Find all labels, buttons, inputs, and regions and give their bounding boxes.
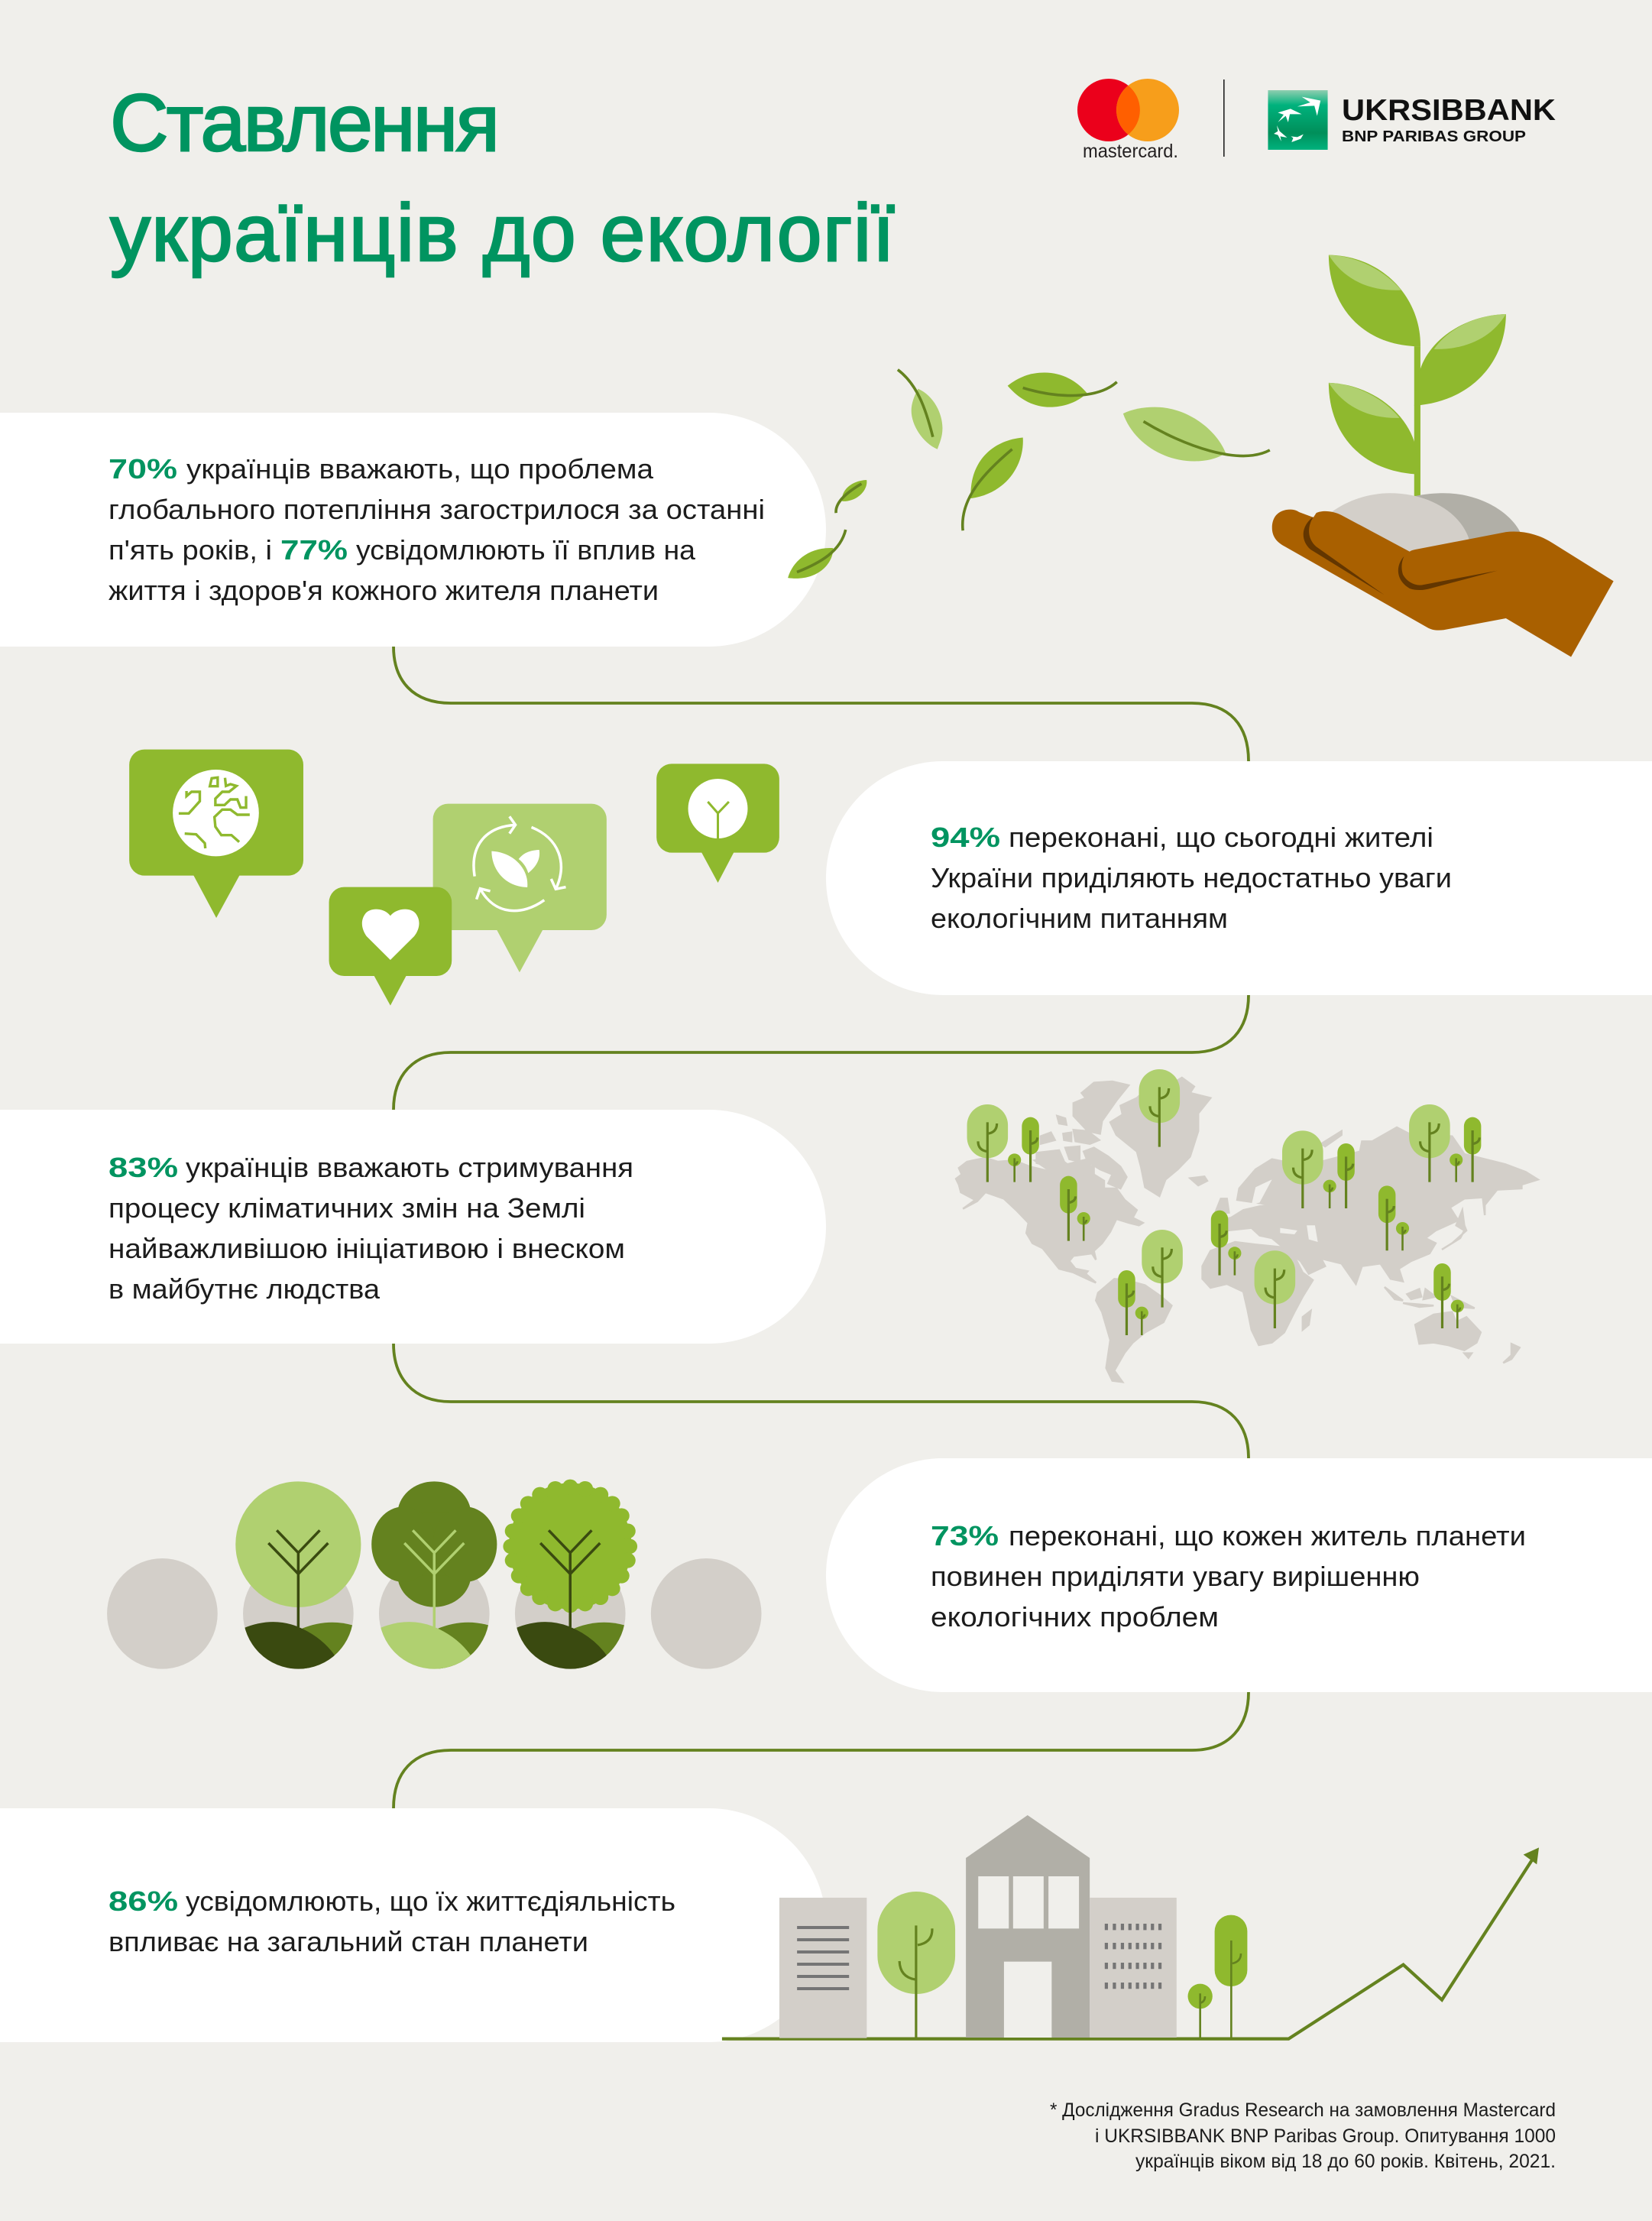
small tree (1188, 1984, 1213, 2038)
falling leaves (788, 370, 1270, 579)
bubble: globe (129, 750, 303, 918)
title (110, 78, 895, 278)
bubble: heart (329, 887, 452, 1006)
grey circle left (107, 1558, 218, 1669)
grey circle right (651, 1558, 761, 1669)
logo: mastercard: mastercard. (1083, 141, 1178, 162)
panel: 73% (826, 1458, 1652, 1692)
bubble: recycling leaves (433, 804, 607, 972)
statement text 70% and 77%: українців вважають, що проблема (186, 453, 654, 485)
statement text 73%: повинен приділяти увагу вирішенню (931, 1561, 1420, 1592)
speech bubbles illustration (129, 750, 779, 1006)
statement text 70% and 77% (109, 453, 765, 606)
ground line and rising arrow (722, 1847, 1539, 2039)
statement text 94%: екологічним питанням (931, 903, 1228, 934)
map trees (967, 1069, 1481, 1335)
tree: round light (235, 1481, 361, 1671)
footnote: українців віком від 18 до 60 років. Квітень, 2021. (1135, 2151, 1556, 2172)
statement text 73% (931, 1520, 1526, 1633)
plant sprout (1329, 255, 1506, 498)
statement text 94%: України приділяють недостатньо уваги (931, 862, 1452, 893)
soil mound (1330, 493, 1520, 553)
tree beside building (877, 1892, 955, 2038)
world map with trees (956, 1069, 1538, 1382)
tree: cloud dark (371, 1481, 497, 1671)
footnote: і UKRSIBBANK BNP Paribas Group. Опитування 1000 (1095, 2125, 1556, 2147)
medium tree (1215, 1915, 1247, 2038)
panel: 86% (0, 1808, 826, 2042)
statement text 83%: процесу кліматичних змін на Землі (109, 1192, 585, 1224)
tree: scalloped green (503, 1480, 637, 1671)
building left (779, 1898, 866, 2038)
city and growth chart illustration (722, 1815, 1539, 2039)
building centre (966, 1815, 1090, 2038)
title: Ставлення (110, 78, 500, 168)
title: українців до екології (110, 188, 895, 278)
statement text 94%: 94% (931, 822, 1000, 853)
row of trees illustration (107, 1480, 761, 1671)
statement text 86% (109, 1885, 675, 1957)
statement text 70% and 77%: 77% (280, 534, 348, 566)
statement text 86%: усвідомлюють, що їх життєдіяльність (186, 1885, 675, 1917)
statement text 70% and 77%: усвідомлюють її вплив на (356, 534, 696, 566)
panel: 83% (0, 1110, 826, 1344)
world map land (956, 1078, 1538, 1382)
logo: ukrsibbank: UKRSIBBANK (1342, 94, 1556, 127)
statement text 83%: найважливішою ініціативою і внеском (109, 1233, 625, 1264)
statement text 73%: переконані, що кожен житель планети (1009, 1520, 1526, 1551)
hand (1272, 510, 1614, 657)
statement text 73%: екологічних проблем (931, 1601, 1219, 1633)
logo: ukrsibbank: BNP PARIBAS GROUP (1342, 128, 1526, 145)
statement text 86%: 86% (109, 1885, 178, 1917)
statement text 73%: 73% (931, 1520, 999, 1551)
statement text 70% and 77%: п'ять років, і (109, 534, 272, 566)
statement text 83% (109, 1152, 633, 1305)
footnote: * Дослідження Gradus Research на замовлення Mastercard (1050, 2099, 1556, 2121)
connector lines (394, 647, 1249, 1808)
statement text 94% (931, 822, 1452, 934)
statement text 94%: переконані, що сьогодні жителі (1009, 822, 1433, 853)
statement text 83%: в майбутнє людства (109, 1273, 381, 1305)
statement text 83%: українців вважають стримування (186, 1152, 633, 1183)
logo: mastercard (1077, 79, 1179, 162)
illustration: falling leaves and plant in hand (788, 255, 1614, 657)
statement text 83%: 83% (109, 1152, 178, 1183)
statement text 70% and 77%: життя і здоров'я кожного жителя планети (109, 575, 659, 606)
logo divider (1223, 79, 1225, 157)
logo: ukrsibbank (1268, 90, 1556, 150)
statement text 86%: впливає на загальний стан планети (109, 1926, 588, 1957)
panel: 94% (826, 761, 1652, 995)
statement text 70% and 77%: 70% (109, 453, 177, 485)
bubble: tree (656, 764, 779, 883)
statement text 70% and 77%: глобального потепління загострилося за останні (109, 494, 765, 525)
building right (1090, 1898, 1177, 2038)
panel: 70% global warming (0, 413, 826, 647)
footnote (1050, 2099, 1556, 2172)
